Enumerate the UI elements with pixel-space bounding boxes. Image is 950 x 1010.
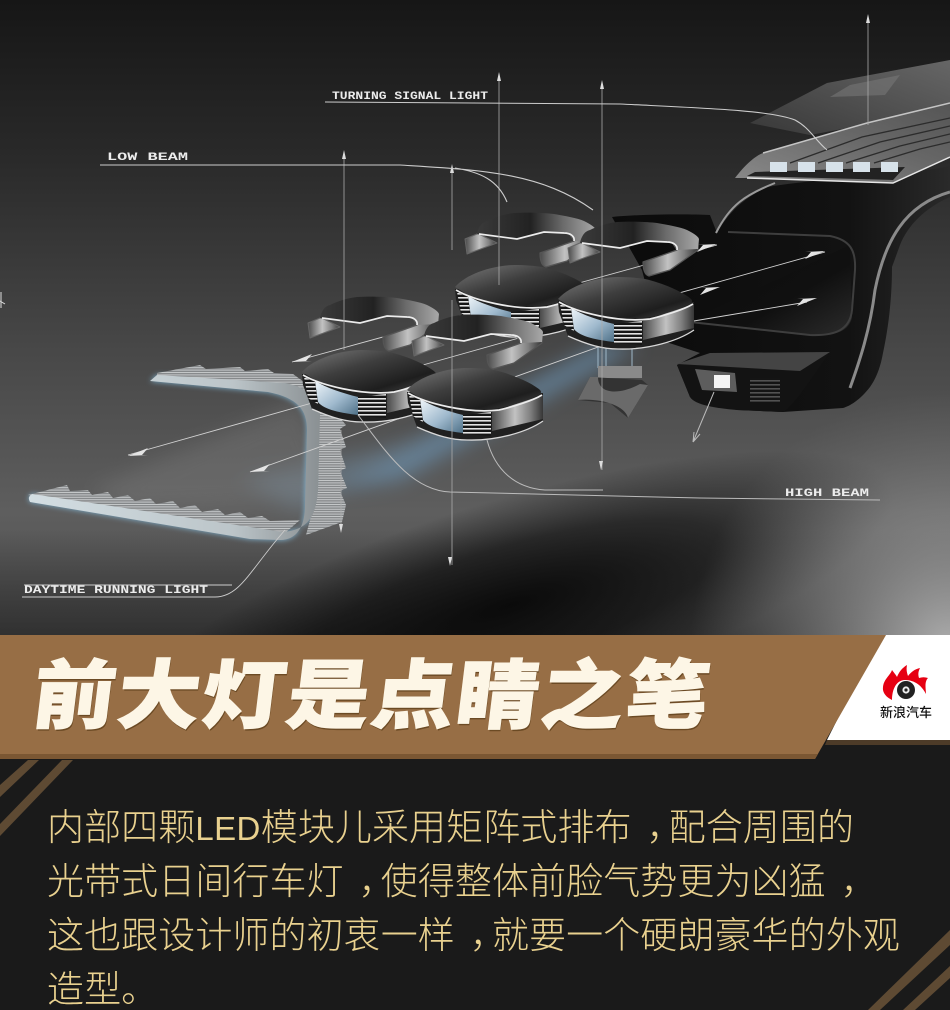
module: back-right: [558, 277, 694, 349]
bottom text panel background: [0, 635, 950, 1010]
label: high beam: [358, 415, 880, 500]
logo text: 新浪汽车: [880, 702, 932, 721]
title: 前大灯是点睛之笔: [28, 635, 719, 744]
panel stripes: bottom-right diagonal accents: [868, 930, 950, 1010]
daytime running light strip: [28, 365, 347, 540]
label: low beam: LOW BEAM: [107, 152, 189, 164]
body text: 造型。: [47, 969, 158, 1010]
cap: front-left: [308, 297, 439, 351]
cap: back-left: [465, 213, 596, 267]
beam rays with arrowheads: [128, 244, 825, 472]
body text: 光带式日间行车灯 ，使得整体前脸气势更为凶猛 ，: [47, 861, 878, 902]
label: daytime running light: DAYTIME RUNNING LIGHT: [24, 585, 209, 597]
corner underline: [825, 740, 950, 745]
tiny edge mark: [0, 292, 5, 308]
label: high beam: HIGH BEAM: [785, 488, 870, 500]
fog lamp: [677, 352, 830, 442]
headlight housing body: [612, 166, 950, 412]
label: turning signal light: TURNING SIGNAL LIGHT: [332, 91, 488, 103]
light glow beams: [90, 345, 640, 510]
module: back-left low beam: [455, 265, 591, 337]
title banner: [0, 635, 886, 759]
small heat-sink bracket: [578, 340, 648, 418]
label: daytime running light: [22, 530, 285, 597]
turn signal assembly: [735, 60, 950, 183]
vertical guide lines and arrows: [339, 14, 870, 566]
label: turning signal light: [325, 91, 827, 150]
white logo corner: [827, 635, 950, 740]
module: front-centre high beam: [407, 368, 543, 440]
cap: back-right: [568, 222, 699, 276]
body text: [47, 807, 900, 1010]
module: front-left: [302, 350, 438, 422]
cap: front-centre: [412, 315, 543, 369]
panel stripes: top-left diagonal accents: [0, 760, 73, 836]
body text: 这也跟设计师的初衷一样 ，就要一个硬朗豪华的外观: [47, 915, 900, 956]
label: low beam: [100, 152, 593, 210]
body text: 内部四颗LED模块儿采用矩阵式排布 ，配合周围的: [47, 807, 854, 848]
icon: sina eye logo: [883, 665, 928, 700]
